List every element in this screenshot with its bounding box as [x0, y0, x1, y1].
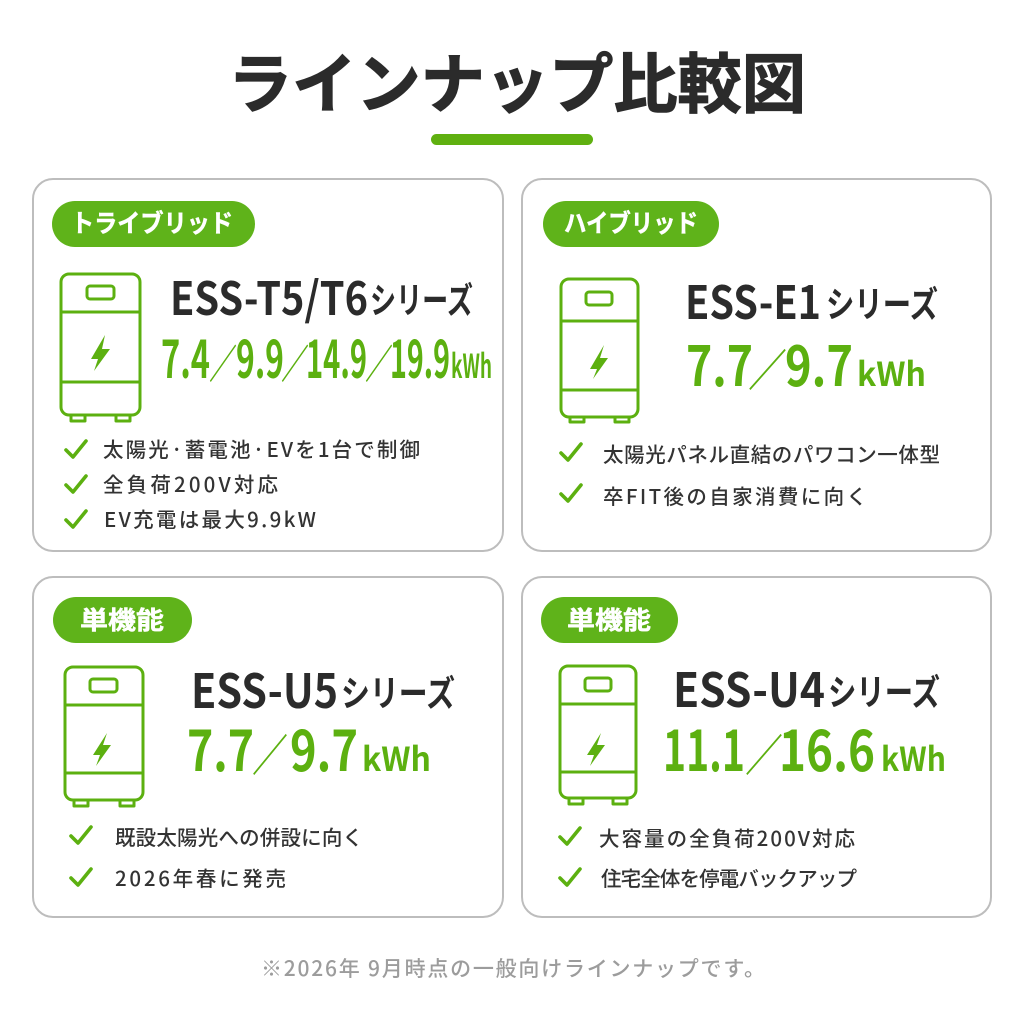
title: ラインナップ比較図: [228, 32, 806, 126]
panel: 単機能 U5: [33, 577, 503, 917]
capacity: [161, 318, 492, 393]
icon: battery: [61, 274, 140, 421]
model name: ESS-U4: [673, 652, 825, 721]
icon: battery: [561, 279, 638, 422]
feature list: 既設太陽光への併設に向く: [115, 821, 363, 851]
badge: トライブリッド: [52, 201, 255, 247]
feature list: 太陽光·蓄電池·EVを1台で制御: [103, 433, 420, 463]
capacity: [663, 707, 946, 788]
feature list: EV充電は最大9.9kW: [104, 503, 316, 533]
icon: battery: [65, 667, 143, 806]
capacity: ／: [748, 335, 787, 399]
panel: トライブリッド: [33, 179, 503, 551]
model name: ESS-U5: [191, 653, 338, 722]
model name: シリーズ: [828, 664, 940, 716]
capacity: kWh: [857, 348, 926, 396]
model name: ESS-E1: [685, 267, 821, 333]
badge: 単機能: 単機能: [567, 601, 651, 637]
capacity: 9.7: [785, 322, 853, 402]
capacity: 14.9: [306, 318, 367, 393]
capacity: 16.6: [779, 707, 875, 788]
capacity: ／: [365, 332, 393, 390]
badge: 単機能: 単機能: [80, 601, 164, 637]
capacity: 7.7: [686, 322, 753, 402]
badge: トライブリッド: トライブリッド: [71, 204, 233, 240]
capacity: ／: [252, 720, 288, 784]
panel: 単機能 U4: [522, 577, 991, 917]
feature list: 卒FIT後の自家消費に向く: [603, 480, 867, 510]
capacity: ／: [281, 332, 309, 390]
model name: シリーズ: [341, 665, 455, 717]
capacity: ／: [209, 332, 237, 390]
model name: シリーズ: [826, 276, 938, 328]
footnote: ※2026年 9月時点の一般向けラインナップです。: [261, 953, 765, 983]
feature list: 太陽光パネル直結のパワコン一体型: [603, 438, 940, 468]
feature list: 2026年春に発売: [115, 862, 286, 892]
badge: 単機能: [541, 597, 678, 643]
capacity: 11.1: [663, 707, 745, 788]
capacity: kWh: [362, 733, 431, 781]
icon: battery: [560, 666, 636, 804]
capacity: 9.9: [236, 318, 284, 393]
feature list: 大容量の全負荷200V対応: [599, 822, 855, 852]
badge: ハイブリッド: [543, 201, 719, 247]
capacity: 7.4: [161, 318, 210, 393]
capacity: kWh: [451, 340, 492, 388]
feature list: [71, 821, 363, 892]
model name: [673, 652, 940, 721]
feature list: 全負荷200V対応: [103, 468, 278, 498]
badge: 単機能: [53, 597, 192, 643]
feature list: [561, 438, 940, 510]
model name: ESS-T5/T6: [170, 263, 368, 329]
feature list: 住宅全体を停電バックアップ: [601, 862, 858, 892]
capacity: [187, 707, 431, 788]
capacity: 19.9: [390, 318, 450, 393]
capacity: 7.7: [187, 707, 254, 788]
feature list: [560, 822, 858, 892]
feature list: [66, 433, 420, 533]
badge: ハイブリッド: ハイブリッド: [564, 204, 698, 240]
capacity: 9.7: [290, 707, 358, 788]
capacity: kWh: [881, 733, 946, 781]
model name: シリーズ: [370, 272, 473, 324]
capacity: [686, 322, 926, 402]
model name: [685, 267, 938, 333]
panel: ハイブリッド: [522, 179, 991, 551]
capacity: ／: [745, 720, 783, 784]
title underline: [431, 134, 593, 145]
model name: [191, 653, 455, 722]
